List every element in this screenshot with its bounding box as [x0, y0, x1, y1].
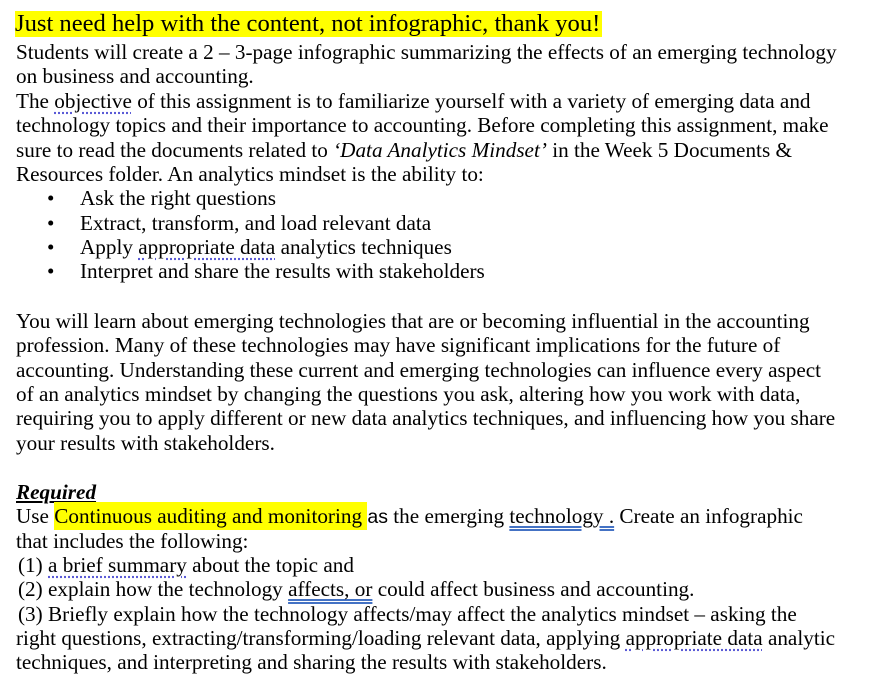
second paragraph: profession. Many of these technologies may have significant implications for the future of: [16, 333, 780, 357]
second paragraph: accounting. Understanding these current and emerging technologies can influence every aspect: [16, 358, 821, 382]
second paragraph: You will learn about emerging technologies that are or becoming influential in the accounting: [16, 309, 810, 333]
required section: Required: [16, 480, 96, 504]
bullet list: [47, 186, 485, 283]
bullet list: Ask the right questions: [80, 186, 276, 210]
second paragraph: of an analytics mindset by changing the questions you ask, altering how you work with data,: [16, 382, 800, 406]
required section: that includes the following:: [16, 529, 248, 553]
required section: (1) a brief summary about the topic and: [18, 553, 354, 577]
intro paragraph: Students will create a 2 – 3-page infographic summarizing the effects of an emerging technology: [16, 40, 837, 64]
intro paragraph: on business and accounting.: [16, 64, 254, 88]
intro paragraph: [16, 40, 837, 186]
required section: techniques, and interpreting and sharing the results with stakeholders.: [16, 650, 607, 674]
bullet list: •: [47, 235, 54, 259]
bullet list: Interpret and share the results with stakeholders: [80, 259, 485, 283]
second paragraph: your results with stakeholders.: [16, 431, 275, 455]
intro paragraph: Resources folder. An analytics mindset is the ability to:: [16, 162, 484, 186]
bullet list: •: [47, 211, 54, 235]
bullet list: •: [47, 259, 54, 283]
required section: (3) Briefly explain how the technology affects/may affect the analytics mindset – asking the: [18, 602, 797, 626]
bullet list: •: [47, 186, 54, 210]
title highlight: Just need help with the content, not infographic, thank you!: [15, 10, 600, 37]
intro paragraph: technology topics and their importance to accounting. Before completing this assignment, make: [16, 113, 829, 137]
second paragraph: [16, 309, 835, 455]
required section: (2) explain how the technology affects, or could affect business and accounting.: [18, 577, 694, 601]
bullet list: Extract, transform, and load relevant data: [80, 211, 431, 235]
required section: Use Continuous auditing and monitoring as the emerging technology . Create an infographic: [16, 504, 803, 528]
bullet list: Apply appropriate data analytics techniques: [80, 235, 452, 259]
intro paragraph: sure to read the documents related to ‘Data Analytics Mindset’ in the Week 5 Documents &: [16, 138, 792, 162]
second paragraph: requiring you to apply different or new data analytics techniques, and influencing how you share: [16, 406, 835, 430]
required section: [16, 480, 835, 674]
intro paragraph: The objective of this assignment is to familiarize yourself with a variety of emerging data and: [16, 89, 811, 113]
required section: right questions, extracting/transforming/loading relevant data, applying appropriate data analytic: [16, 626, 835, 650]
